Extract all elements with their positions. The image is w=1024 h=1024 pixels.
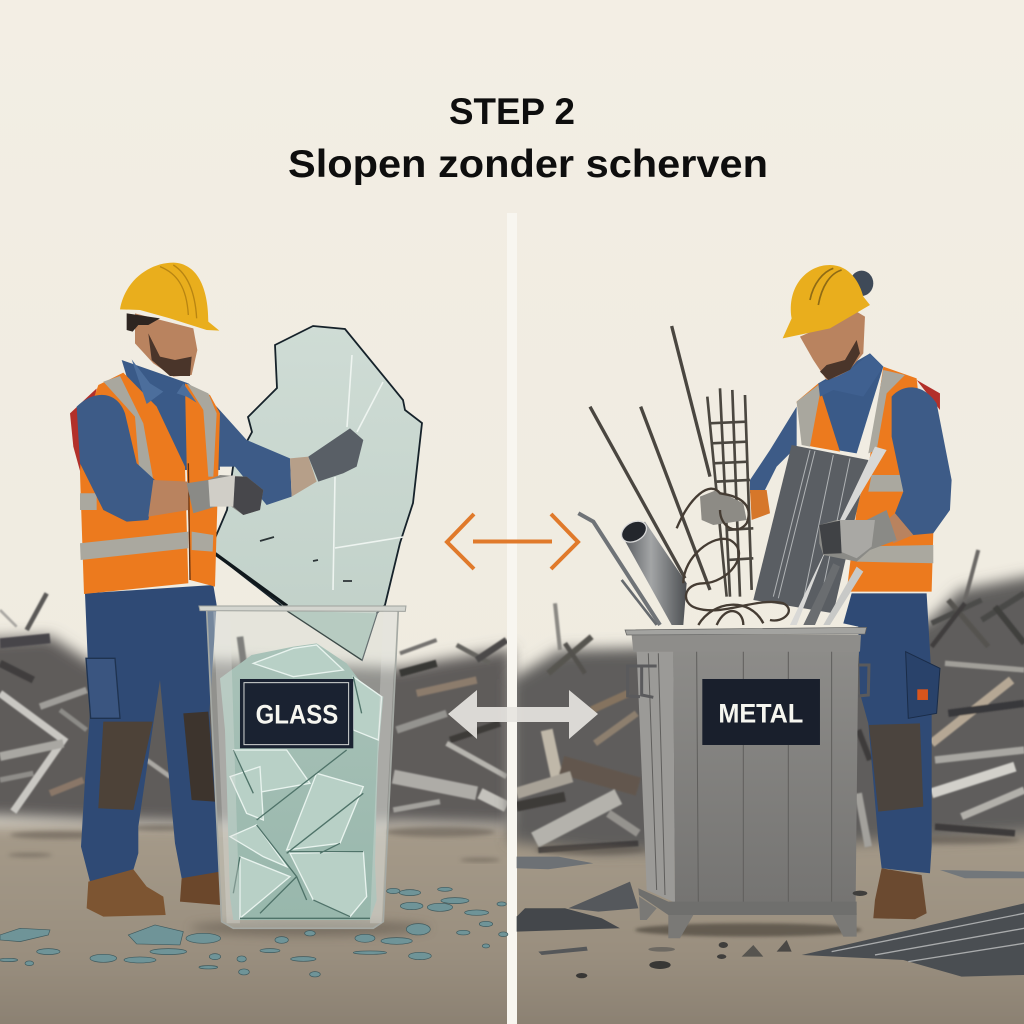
right panel: metal worker xyxy=(517,265,1024,978)
left arm xyxy=(77,395,157,522)
sides xyxy=(637,652,675,903)
handles xyxy=(628,665,869,697)
glove on sheet xyxy=(819,510,897,562)
debris pile left xyxy=(0,593,512,826)
vest xyxy=(80,373,188,594)
pipe xyxy=(622,522,687,625)
label: metal xyxy=(702,679,820,745)
vest left xyxy=(797,383,840,452)
headlamp xyxy=(850,271,873,296)
corrugated sheet xyxy=(753,445,868,613)
shirt xyxy=(818,353,883,453)
collar xyxy=(132,359,197,404)
metal strips xyxy=(578,513,660,625)
worker torso xyxy=(578,265,952,625)
left sleeve xyxy=(750,407,797,493)
shadow xyxy=(635,923,862,937)
worker torso xyxy=(70,263,363,594)
helmet xyxy=(120,263,219,331)
metal bin xyxy=(625,627,869,938)
title: STEP 2 xyxy=(449,91,575,132)
glove on wire xyxy=(700,490,747,525)
worker legs xyxy=(81,585,220,917)
wire tangle xyxy=(677,489,789,625)
head xyxy=(800,312,865,380)
boot xyxy=(873,868,927,919)
helmet xyxy=(783,265,870,338)
arrow: white double arrow xyxy=(448,690,598,739)
broken glass xyxy=(220,643,383,920)
metal bars xyxy=(590,326,710,590)
worker legs xyxy=(843,593,940,919)
label: glass xyxy=(240,679,353,748)
glass fragments on ground xyxy=(0,887,508,977)
glass bin xyxy=(199,606,406,928)
bin rim xyxy=(199,606,406,611)
center divider xyxy=(507,213,517,1024)
boot left xyxy=(87,869,166,917)
label: glass: GLASS xyxy=(256,699,338,729)
base xyxy=(638,888,857,915)
head xyxy=(135,313,197,377)
left panel: glass worker xyxy=(0,263,508,977)
ground debris at pile base xyxy=(8,825,1020,862)
title: Slopen zonder scherven xyxy=(288,143,768,186)
title xyxy=(288,91,768,186)
boot right xyxy=(180,872,220,905)
rebar mesh xyxy=(707,388,753,597)
glass pane xyxy=(210,326,422,660)
shadow under glass bin xyxy=(190,920,430,936)
right sleeve xyxy=(892,387,952,535)
label: metal: METAL xyxy=(718,699,803,729)
vest right xyxy=(847,367,933,592)
glove xyxy=(187,475,263,515)
feet xyxy=(639,897,857,938)
scrap on ground xyxy=(517,857,1024,978)
rim xyxy=(632,635,861,652)
arrow: orange double arrow xyxy=(447,514,578,569)
right arm xyxy=(217,407,292,505)
debris pile right xyxy=(510,550,1024,852)
